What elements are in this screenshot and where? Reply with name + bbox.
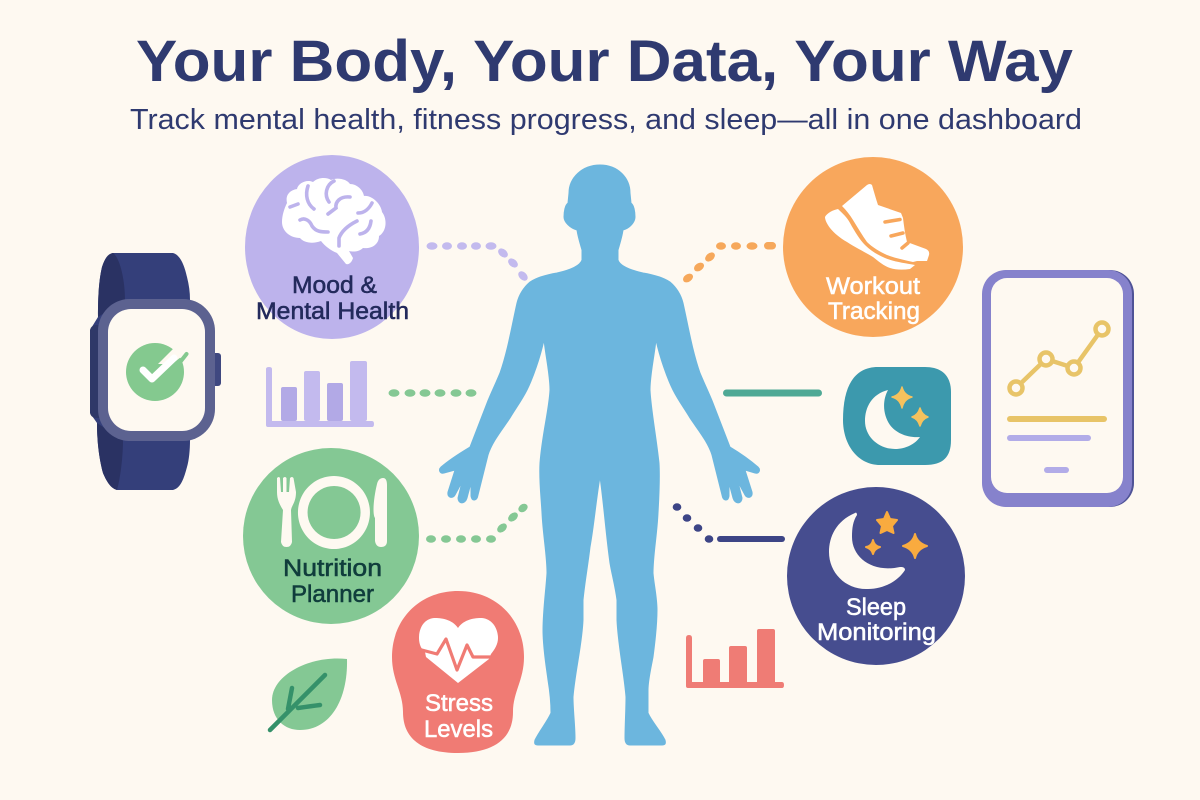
- title: Your Body, Your Data, Your Way: [136, 29, 1073, 94]
- connector: green dots: [388, 389, 476, 397]
- label: stress levels: Stress: [425, 690, 493, 717]
- watch crown: [211, 353, 221, 386]
- label: workout tracking: Tracking: [828, 298, 920, 325]
- connector: nutrition dots: [426, 502, 529, 543]
- panel: nutrition planner: [243, 448, 419, 624]
- label: sleep monitoring: Sleep: [846, 594, 906, 621]
- label: mood and mental health: Mood &: [292, 272, 377, 299]
- watch strap shading: [90, 253, 125, 490]
- connector: teal line: [723, 390, 822, 396]
- tablet dashboard: [982, 270, 1134, 507]
- label: mood and mental health: Mental Health: [256, 298, 409, 325]
- watch case: [98, 299, 215, 441]
- panel: mood and mental health: [245, 155, 419, 339]
- icon: green check: [126, 338, 190, 401]
- icon: brain: [282, 178, 386, 264]
- icon: heart with pulse: [418, 618, 499, 683]
- panel: workout tracking: [783, 157, 963, 337]
- icon: running shoe: [825, 184, 929, 270]
- panel: stress levels: [392, 591, 524, 753]
- icon: moon and stars: [829, 512, 927, 589]
- dashboard text lines: [1007, 416, 1107, 473]
- bar chart: coral: [686, 629, 784, 688]
- smartwatch: [90, 253, 221, 490]
- icon: fork plate knife: [277, 476, 387, 549]
- connector: sleep dots and line: [673, 503, 785, 543]
- tablet screen: [991, 278, 1123, 493]
- label: workout tracking: Workout: [826, 273, 920, 300]
- line chart: [1010, 322, 1108, 394]
- panel: sleep monitoring: [787, 487, 965, 665]
- icon: leaf: [270, 658, 347, 730]
- label: nutrition planner: Planner: [291, 581, 374, 608]
- watch strap: [90, 253, 190, 490]
- subtitle: Track mental health, fitness progress, and sleep—all in one dashboard: [130, 104, 1082, 136]
- watch screen: [108, 309, 205, 431]
- connector: mood dots: [426, 242, 530, 283]
- bar chart: lavender: [266, 361, 374, 427]
- tablet frame: [985, 270, 1134, 507]
- icon: moon tile: [843, 367, 951, 465]
- label: nutrition planner: Nutrition: [283, 555, 382, 582]
- human body silhouette: [440, 165, 759, 745]
- label: stress levels: Levels: [424, 716, 493, 743]
- connector: workout dots: [681, 242, 776, 284]
- label: sleep monitoring: Monitoring: [817, 619, 936, 646]
